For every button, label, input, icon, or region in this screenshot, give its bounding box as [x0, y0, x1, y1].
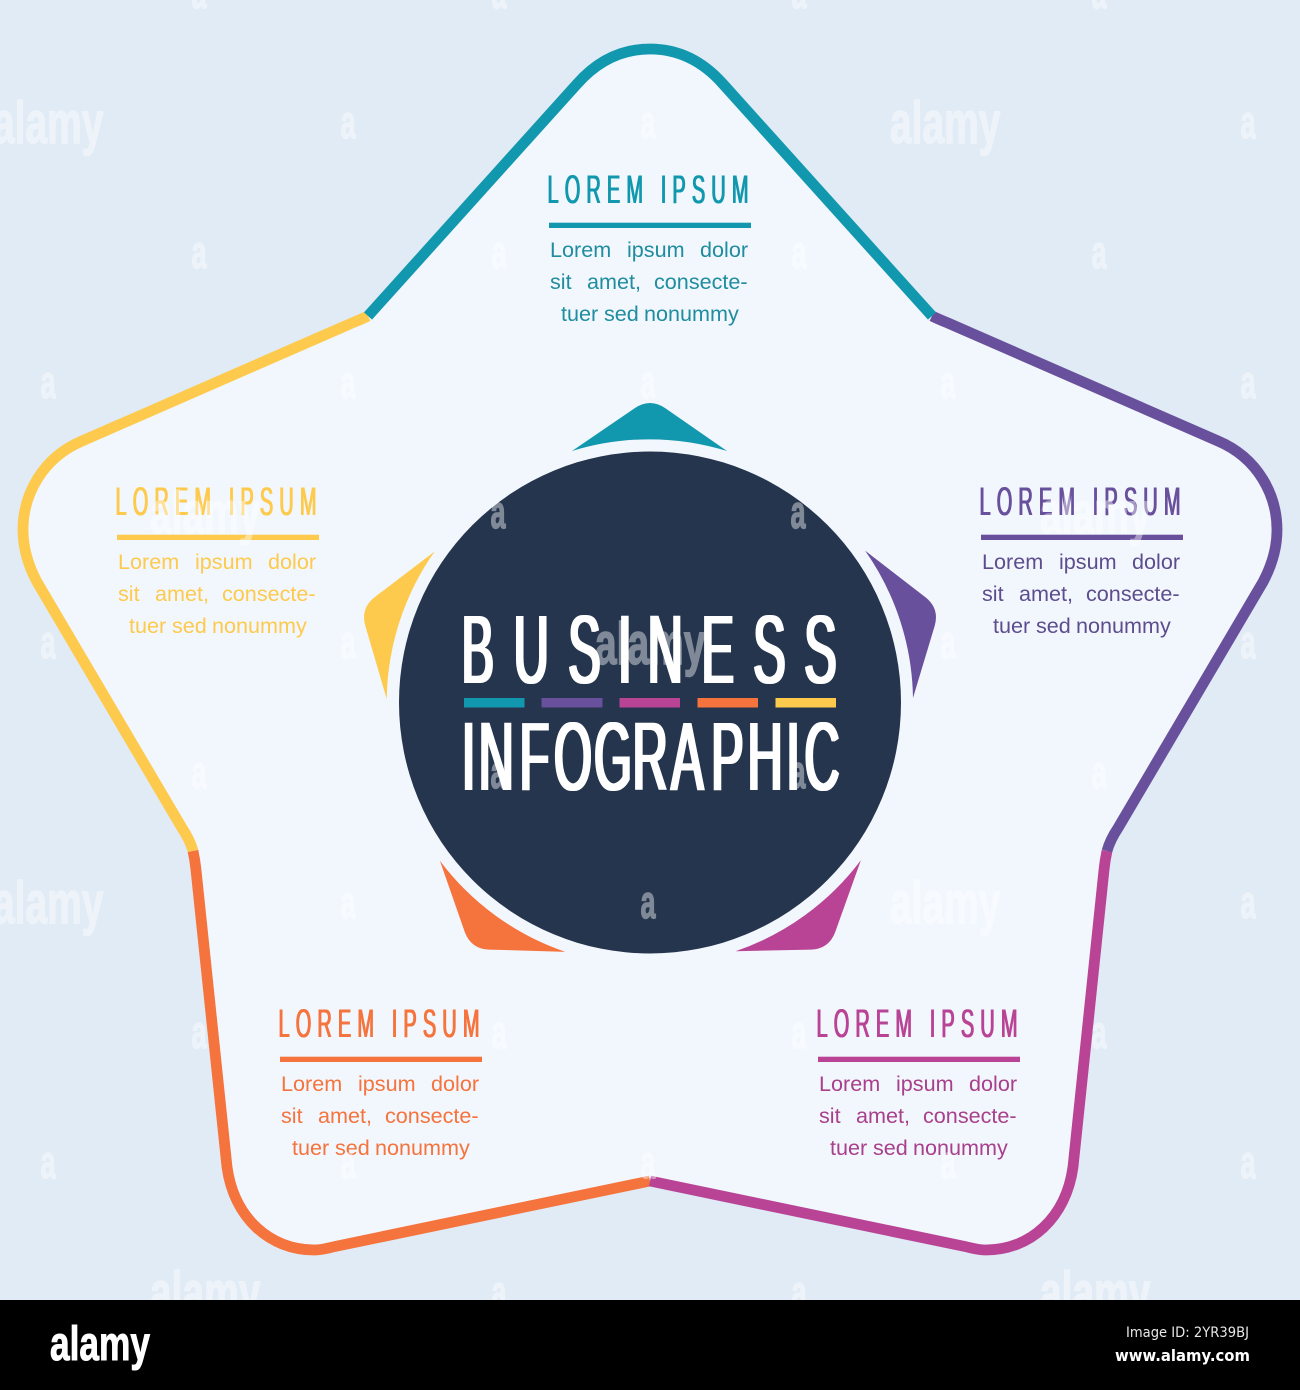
footer bar: [0, 1300, 1300, 1390]
body text: sed: [1036, 613, 1071, 638]
watermark: repeated small marks: a: [192, 226, 207, 278]
footer url: www.alamy.com: [1115, 1346, 1250, 1365]
watermark: repeated small marks: a: [792, 1266, 807, 1318]
panel: right purple: [980, 478, 1183, 638]
body text: ipsum: [195, 549, 253, 574]
body text: consecte-: [1086, 581, 1180, 606]
rule: [117, 535, 319, 540]
body text: consecte-: [385, 1103, 479, 1128]
body text: sit: [281, 1103, 303, 1128]
outline segment: yellow: [23, 316, 368, 851]
watermark: repeated small marks: a: [341, 616, 356, 668]
watermark: repeated small marks: a: [1241, 356, 1256, 408]
watermark: large marks: alamy: [1040, 1260, 1151, 1326]
outline segment: magenta: [650, 851, 1107, 1250]
body text: sed: [873, 1135, 908, 1160]
watermark: repeated small marks: a: [341, 1136, 356, 1188]
heading: LOREM IPSUM: [980, 478, 1180, 524]
outline segment: teal: [368, 49, 932, 316]
body text: amet,: [155, 581, 209, 606]
body text: ipsum: [1059, 549, 1117, 574]
watermark: large marks: alamy: [150, 1260, 261, 1326]
watermark: repeated small marks: a: [641, 876, 656, 928]
central circle: [399, 452, 901, 954]
image id: Image ID: 2YR39BJ: [1126, 1325, 1249, 1341]
body text: amet,: [587, 269, 641, 294]
watermark: repeated small marks: a: [192, 1006, 207, 1058]
body text: dolor: [969, 1071, 1017, 1096]
watermark: repeated small marks: a: [941, 356, 956, 408]
panel: bottom right magenta: [816, 1000, 1020, 1160]
body text: Lorem: [819, 1071, 880, 1096]
body text: sit: [819, 1103, 841, 1128]
body text: sed: [172, 613, 207, 638]
rule: [280, 1057, 482, 1062]
watermark: repeated small marks: a: [1092, 746, 1107, 798]
watermark: large marks: alamy: [1040, 480, 1151, 546]
body text: nonummy: [913, 1135, 1008, 1160]
pointer: purple: [865, 536, 959, 698]
watermark: repeated small marks: a: [1241, 1136, 1256, 1188]
body text: consecte-: [654, 269, 748, 294]
body text: ipsum: [896, 1071, 954, 1096]
watermark: repeated small marks: a: [1092, 1006, 1107, 1058]
outline segment: orange: [193, 851, 650, 1250]
pointer: orange: [412, 861, 565, 991]
body text: tuer: [830, 1135, 867, 1160]
watermark: repeated small marks: a: [492, 1266, 507, 1318]
watermark: repeated small marks: a: [792, 1006, 807, 1058]
body text: Lorem: [982, 549, 1043, 574]
body text: tuer: [993, 613, 1030, 638]
panel: bottom left orange: [278, 1000, 482, 1160]
body text: Lorem: [281, 1071, 342, 1096]
watermark: repeated small marks: a: [41, 356, 56, 408]
watermark: repeated small marks: a: [941, 1136, 956, 1188]
body text: ipsum: [627, 237, 685, 262]
watermark: repeated small marks: a: [641, 1136, 656, 1188]
watermark: repeated small marks: a: [791, 486, 806, 538]
rule: [818, 1057, 1020, 1062]
title: infographic: INFOGRAPHIC: [462, 704, 840, 812]
body text: Lorem: [118, 549, 179, 574]
watermark: repeated small marks: a: [341, 96, 356, 148]
body text: tuer: [129, 613, 166, 638]
watermark: repeated small marks: a: [1241, 616, 1256, 668]
watermark: large marks: alamy: [890, 90, 1001, 156]
body text: tuer: [292, 1135, 329, 1160]
watermark: repeated small marks: a: [791, 746, 806, 798]
body text: sit: [550, 269, 572, 294]
rule: [981, 535, 1183, 540]
watermark: large marks: alamy: [890, 870, 1001, 936]
body text: dolor: [431, 1071, 479, 1096]
watermark: repeated small marks: a: [341, 876, 356, 928]
watermark: repeated small marks: a: [492, 1006, 507, 1058]
body text: sit: [982, 581, 1004, 606]
body text: dolor: [1132, 549, 1180, 574]
rule: [549, 223, 751, 228]
heading: LOREM IPSUM: [816, 1000, 1018, 1046]
colour bars: [464, 698, 836, 708]
body text: sit: [118, 581, 140, 606]
body text: sed: [335, 1135, 370, 1160]
body text: dolor: [268, 549, 316, 574]
watermark: repeated small marks: a: [792, 226, 807, 278]
body text: consecte-: [222, 581, 316, 606]
body text: amet,: [856, 1103, 910, 1128]
pointer: magenta: [736, 860, 889, 990]
body text: amet,: [1019, 581, 1073, 606]
footer logo: alamy: [50, 1317, 150, 1370]
watermark: repeated small marks: a: [491, 746, 506, 798]
body text: nonummy: [644, 301, 739, 326]
pointer: teal: [572, 403, 727, 451]
title: business: BUSINESS: [462, 597, 837, 705]
watermark: repeated small marks: a: [1092, 226, 1107, 278]
panel: left yellow: [116, 478, 319, 638]
body text: nonummy: [1076, 613, 1171, 638]
panel: top teal: [548, 166, 751, 326]
body text: ipsum: [358, 1071, 416, 1096]
heading: LOREM IPSUM: [116, 478, 316, 524]
body text: Lorem: [550, 237, 611, 262]
watermark: repeated small marks: a: [941, 616, 956, 668]
pointer: yellow: [341, 537, 435, 699]
body text: tuer: [561, 301, 598, 326]
watermark: repeated small marks: a: [492, 226, 507, 278]
watermark: repeated small marks: a: [641, 356, 656, 408]
heading: LOREM IPSUM: [278, 1000, 480, 1046]
watermark: repeated small marks: a: [41, 1136, 56, 1188]
watermark: repeated small marks: a: [192, 746, 207, 798]
watermark: repeated small marks: a: [641, 96, 656, 148]
watermark: repeated small marks: a: [1241, 96, 1256, 148]
title block: [462, 597, 840, 812]
outline segment: purple: [932, 316, 1277, 851]
watermark: repeated small marks: a: [491, 486, 506, 538]
body text: nonummy: [212, 613, 307, 638]
body text: dolor: [700, 237, 748, 262]
watermark: repeated small marks: a: [341, 356, 356, 408]
watermark: large marks: alamy: [595, 611, 706, 677]
body text: sed: [604, 301, 639, 326]
watermark: repeated small marks: a: [41, 616, 56, 668]
watermark: large marks: alamy: [150, 480, 261, 546]
body text: amet,: [318, 1103, 372, 1128]
body text: nonummy: [375, 1135, 470, 1160]
watermark: large marks: [0, 90, 1151, 1326]
body text: consecte-: [923, 1103, 1017, 1128]
watermark: repeated small marks: a: [1241, 876, 1256, 928]
heading: LOREM IPSUM: [548, 166, 748, 212]
